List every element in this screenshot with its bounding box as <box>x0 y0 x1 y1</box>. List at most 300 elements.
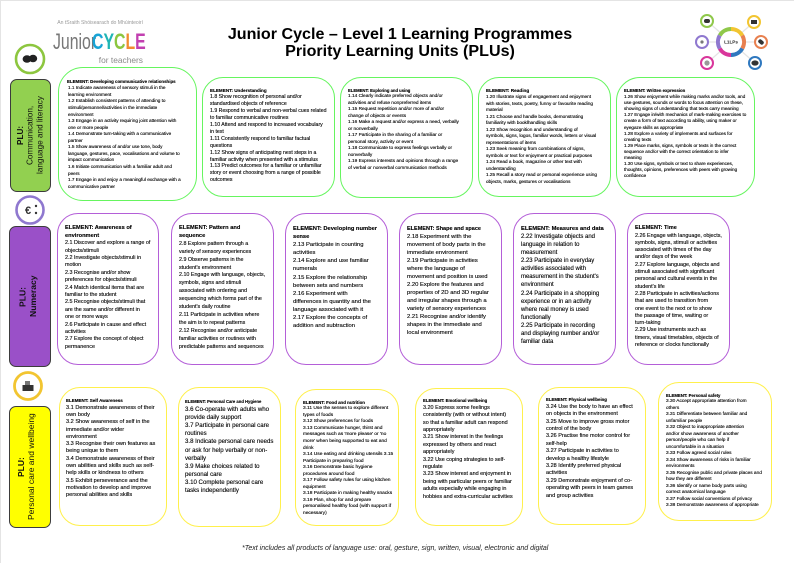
title: Junior Cycle – Level 1 Learning Programmes <box>228 25 572 43</box>
heading: environment <box>65 233 99 239</box>
outcomes text <box>635 233 722 348</box>
outcomes text: appropriately <box>423 449 454 455</box>
outcomes text: develop a healthy lifestyle <box>546 456 609 462</box>
outcomes text: 1.8 Show recognition of personal and/or <box>210 94 302 100</box>
outcomes text: functionally <box>521 315 551 321</box>
outcomes text: shapes in the immediate and <box>407 322 482 328</box>
outcomes text: 3.34 Show awareness of risks in familiar <box>666 458 751 463</box>
outcomes text <box>185 406 274 494</box>
outcomes text: 3.9 Make choices related to <box>185 463 260 470</box>
outcomes text: material <box>486 107 503 112</box>
outcomes text: 1.26 Show enjoyment while making marks and/or tools, and <box>624 94 745 99</box>
outcomes text: 2.12 Recognise and/or anticipate <box>179 328 257 334</box>
outcomes text: 3.36 Identify or name body parts using <box>666 484 747 489</box>
outcomes text <box>210 94 327 183</box>
outcomes text: appropriately <box>423 427 454 433</box>
outcomes text: peers <box>68 171 80 176</box>
outcomes text: partner <box>68 138 83 143</box>
panel: shape and space <box>399 213 502 365</box>
outcomes text: 2.6 Participate in cause and effect <box>65 322 146 328</box>
outcomes text <box>65 240 150 350</box>
outcomes text: objects, marks, gestures or vocalisations <box>486 179 570 184</box>
heading: ELEMENT: Time <box>635 225 677 231</box>
outcomes text: that are used to transition from <box>635 298 708 304</box>
outcomes text: regulate <box>423 464 443 470</box>
outcomes text: tasks independently <box>185 487 239 494</box>
outcomes text: 2.5 Recognise objects/stimuli that <box>65 299 145 305</box>
panel: understanding <box>202 77 335 197</box>
outcomes text: 1.24 Read a book, magazine or other text with <box>486 159 582 164</box>
outcomes text: symbols, signs, logos, familiar words, letters or visual <box>486 133 596 138</box>
outcomes text: communicative partner <box>68 184 115 189</box>
outcomes text: objects/stimuli <box>65 248 99 254</box>
outcomes text: 2.25 Participate in recording <box>521 323 595 329</box>
outcomes text: associated with times of the day <box>635 247 711 253</box>
outcomes text: being unique to them <box>66 448 118 454</box>
outcomes text: are the same and/or different in <box>65 307 140 313</box>
outcomes text: 2.16 Experiment with <box>293 291 348 297</box>
outcomes text: and displaying number and/or <box>521 331 599 337</box>
outcomes text: 2.18 Experiment with the <box>407 234 471 240</box>
outcomes text: stimuli/personnel/activities in the immediate <box>68 105 157 110</box>
outcomes text: 2.11 Participate in activities where <box>179 312 259 318</box>
outcomes text: Participate in preparing food <box>303 459 364 464</box>
outcomes text: 1.5 Show awareness of and/or use tone, body <box>68 144 162 149</box>
outcomes text: 1.2 Establish consistent patterns of attending to <box>68 98 166 103</box>
outcomes text: language in relation to <box>521 242 579 248</box>
outcomes text: 3.37 Follow social conventions of privacy <box>666 497 752 502</box>
outcomes text: 3.26 Practise fine motor control for <box>546 433 630 439</box>
outcomes text: being with particular peers or familiar <box>423 479 512 485</box>
outcomes text <box>520 234 600 345</box>
outcomes text: motivation to develop and improve <box>66 485 151 491</box>
outcomes text: standardised objects of reference <box>210 101 287 107</box>
outcomes text: environment <box>68 112 94 116</box>
outcomes text: 3.24 Use the body to have an effect <box>546 404 633 410</box>
outcomes text: 2.22 Investigate objects and <box>521 234 595 240</box>
outcomes text: 1.28 Explore a variety of implements and surfaces for <box>624 131 733 136</box>
panel label: numeracy <box>9 226 51 367</box>
outcomes text: 3.10 Complete personal care <box>185 479 263 486</box>
outcomes text: control of the body <box>546 426 591 432</box>
outcomes text: the passage of time, waiting or <box>635 313 708 319</box>
outcomes text: symbols, signs and stimuli <box>179 280 241 286</box>
outcomes text: 3.11 Use the senses to explore different <box>303 406 388 411</box>
outcomes text: learning environment <box>68 92 111 97</box>
outcomes text: with stories, texts, poetry, funny or favourite reading <box>486 101 593 106</box>
outcomes text: between sets and numbers <box>293 283 363 289</box>
panel label: numeracy: Numeracy <box>28 276 38 317</box>
logo: Junior Cycle for teachers: for teachers <box>99 55 143 65</box>
outcomes text: 2.13 Participate in counting <box>293 242 364 248</box>
heading: ELEMENT: Self Awareness <box>66 398 123 403</box>
icon: L1LPs wheel <box>695 14 768 70</box>
outcomes text: so that a familiar adult can respond <box>423 420 508 426</box>
outcomes text: 3.31 Differentiate between familiar and <box>666 412 747 417</box>
outcomes text: questions <box>210 143 232 149</box>
outcomes text: environments <box>666 464 695 469</box>
outcomes text: 2.9 Observe patterns in the <box>179 257 243 263</box>
panel: food and nutrition <box>295 389 399 526</box>
outcomes text: motion <box>65 262 81 268</box>
outcomes text: sequence and/or with the correct orientation to infer <box>624 149 729 154</box>
outcomes text: 3.18 Participate in making healthy snacks <box>303 491 392 496</box>
outcomes text: 3.30 Accept appropriate attention from <box>666 399 747 404</box>
outcomes text: 2.17 Explore the concepts of <box>293 315 367 321</box>
panel: written expression <box>616 77 755 197</box>
icon: personal care and wellbeing <box>13 371 43 401</box>
panel label: personal care and wellbeing <box>9 406 51 528</box>
outcomes text: correct anatomical language <box>666 490 726 495</box>
outcomes text: creating texts <box>624 137 651 142</box>
outcomes text: 1.19 Express interests and opinions through a range <box>348 159 458 164</box>
outcomes text: familiar activities or routines with <box>179 336 256 342</box>
outcomes text: and/or days of the week <box>635 254 692 260</box>
outcomes text: immediate environment <box>407 250 468 256</box>
outcomes text: timers, visual timetables, objects of <box>635 335 719 341</box>
outcomes text <box>348 94 459 171</box>
outcomes text: 1.9 Respond to verbal and non-verbal cues related <box>210 108 327 114</box>
outcomes text: verbally <box>185 455 206 462</box>
outcomes text: 2.27 Explore language, objects and <box>635 262 720 268</box>
outcomes text: 1.15 Request repetition and/or more of and/or <box>348 107 444 112</box>
outcomes text: confidence <box>624 173 646 178</box>
outcomes text: one or more people <box>68 125 108 130</box>
outcomes text <box>423 405 513 500</box>
outcomes text: 1.1 Indicate awareness of sensory stimuli in the <box>68 85 166 90</box>
outcomes text <box>66 405 156 498</box>
outcomes text: operating with peers in team games <box>546 485 633 491</box>
outcomes text: 2.23 Participate in everyday <box>521 258 594 264</box>
outcomes text: or nonverbally <box>348 127 378 132</box>
heading: ELEMENT: Developing number <box>293 226 377 232</box>
outcomes text: 3.6 Co-operate with adults who <box>185 406 269 413</box>
outcomes text: immediate and/or wider <box>66 427 124 433</box>
outcomes text: activities <box>293 250 315 256</box>
heading: sequence <box>179 233 205 239</box>
heading: ELEMENT: Reading <box>486 88 529 93</box>
outcomes text: familiarity with booklhandling skills <box>486 120 557 125</box>
outcomes text: addition and subtraction <box>293 323 355 329</box>
outcomes text: 3.35 Recognise public and private places and <box>666 471 762 476</box>
outcomes text: symbols or text for enjoyment or practical purposes <box>486 153 592 158</box>
outcomes text: personal and cultural events in the <box>635 276 717 282</box>
outcomes text: 3.22 Use coping strategies to self- <box>423 457 505 463</box>
outcomes text: 3.13 Communicate hunger, thirst and <box>303 426 382 431</box>
outcomes text: activities <box>546 470 567 476</box>
outcomes text: activities associated with <box>521 266 586 272</box>
outcomes text: 2.10 Engage with language, objects, <box>179 272 265 278</box>
outcomes text: student's environment <box>179 265 231 271</box>
outcomes text: 1.17 Participate in the sharing of a familiar or <box>348 133 442 138</box>
panel: personal safety <box>658 382 772 521</box>
outcomes text: personalised healthy food (with support if <box>303 504 391 509</box>
outcomes text: or ask for help verbally or non- <box>185 447 267 454</box>
outcomes text: variety of sensory experiences <box>407 306 486 312</box>
outcomes text: 3.28 Identify preferred physical <box>546 463 621 469</box>
outcomes text: hobbies and extra-curricular activities <box>423 494 513 500</box>
footnote: *Text includes all products of language use: oral, gesture, sign, written, visual, electronic and digital <box>242 545 548 552</box>
outcomes text: personal care <box>185 471 222 478</box>
outcomes text: showing signs of understanding that texts carry meaning <box>624 106 739 111</box>
outcomes text: 3.33 Follow agreed social rules <box>666 451 731 456</box>
outcomes text: properties of 2D and 3D regular <box>407 290 489 296</box>
outcomes text: environment <box>66 434 97 440</box>
heading: ELEMENT: Shape and space <box>407 226 481 232</box>
panel: reading <box>478 77 611 197</box>
outcomes text: movement of body parts in the <box>407 242 486 248</box>
outcomes text: student's life <box>635 284 665 290</box>
outcomes text: experience or in an activity <box>521 299 591 305</box>
outcomes text: 2.21 Recognise and/or identify <box>407 314 486 320</box>
outcomes text: where real money is used <box>521 307 589 313</box>
heading: ELEMENT: Physical wellbeing <box>546 397 607 402</box>
outcomes text: to familiar communicative routines <box>210 115 288 121</box>
heading: ELEMENT: Pattern and <box>179 225 240 231</box>
outcomes text: activities <box>65 329 86 335</box>
outcomes text: expressed by others and react <box>423 442 496 448</box>
outcomes text: of verbal or nonverbal communication methods <box>348 166 447 171</box>
outcomes text: 3.12 Show preferences for foods <box>303 419 373 424</box>
outcomes text <box>406 234 489 336</box>
outcomes text: activities and refuse nonpreferred items <box>348 101 431 106</box>
panel label: communication, language and literacy <box>10 79 51 192</box>
outcomes text: turn-taking <box>635 320 660 326</box>
panel label: personal care and wellbeing: Personal care and wellbeing <box>26 414 36 520</box>
icon: L1LPs wheel: L1LPs <box>724 40 738 45</box>
outcomes text: 3.3 Recognise their own features as <box>66 441 155 447</box>
icon: numeracy: € <box>25 205 31 217</box>
outcomes text: 3.16 Demonstrate basic hygiene <box>303 465 372 470</box>
outcomes text: own abilities and skills such as self- <box>66 463 154 469</box>
outcomes text: the aim is to repeat patterns <box>179 320 245 326</box>
outcomes text: 3.1 Demonstrate awareness of their <box>66 405 155 411</box>
outcomes text: 1.14 Clearly indicate preferred objects and/or <box>348 94 443 99</box>
outcomes text: 1.11 Consistently respond to familiar factual <box>210 136 310 142</box>
outcomes text <box>546 404 633 499</box>
outcomes text: 3.23 Show interest and enjoyment in <box>423 471 511 477</box>
outcomes text: predictable patterns and sequences <box>179 344 264 350</box>
outcomes text: 3.7 Participate in personal care <box>185 422 269 429</box>
outcomes text: impact communication <box>68 157 114 162</box>
outcomes text: 3.32 Object to inappropriate attention <box>666 425 744 430</box>
panel: exploring and using <box>340 77 473 198</box>
outcomes text: familiar to the student <box>65 292 117 298</box>
outcomes text: how they are different <box>666 477 712 482</box>
outcomes text: environment <box>521 282 554 288</box>
outcomes text: language, gestures, pace, vocalisations and volume to <box>68 151 180 156</box>
outcomes text: adults especially while engaging in <box>423 486 506 492</box>
panel label: personal care and wellbeing: PLU: <box>16 457 26 477</box>
heading: ELEMENT: Emotional wellbeing <box>423 398 487 403</box>
outcomes text <box>486 94 597 184</box>
outcomes text: 2.4 Match identical items that are <box>65 285 144 291</box>
panel: self awareness <box>59 387 167 526</box>
panel label: numeracy: PLU: <box>18 286 28 307</box>
panel: emotional wellbeing <box>415 388 523 526</box>
heading: sense <box>293 234 309 240</box>
outcomes text: 3.20 Express some feelings <box>423 405 490 411</box>
outcomes text: 2.15 Explore the relationship <box>293 275 367 281</box>
logo: Junior Cycle for teachers: An tSraith Shóisearach do Mhúinteoirí <box>57 20 143 26</box>
outcomes text: story or event choosing from a range of possible <box>210 170 321 176</box>
outcomes text: others <box>666 406 679 411</box>
panel: time <box>627 213 730 365</box>
icon: numeracy <box>15 195 45 225</box>
outcomes text: meaning <box>624 155 642 160</box>
outcomes text: 1.20 Illustrate signs of engagement and enjoyment <box>486 94 591 99</box>
outcomes text: outcomes <box>210 177 232 183</box>
outcomes text: 1.12 Show signs of anticipating next steps in a <box>210 150 316 156</box>
outcomes text: 3.27 Participate in activities to <box>546 448 619 454</box>
panel: developing communicative relationships <box>58 67 197 201</box>
outcomes text: 2.24 Participate in a shopping <box>521 291 599 297</box>
outcomes text: 3.14 Use eating and drinking utensils 3.15 <box>303 452 393 457</box>
outcomes text: 3.29 Demonstrate enjoyment of co- <box>546 478 632 484</box>
heading: ELEMENT: Personal safety <box>666 393 720 398</box>
heading <box>293 226 377 240</box>
icon: communication speech bubbles <box>14 44 46 74</box>
outcomes text: eyegaze skills as appropriate <box>624 125 683 130</box>
outcomes text: 2.1 Discover and explore a range of <box>65 240 150 246</box>
outcomes text: 2.28 Participate in activities/actions <box>635 291 719 297</box>
outcomes text: 3.17 Follow safety rules for using kitchen <box>303 478 390 483</box>
outcomes text <box>303 406 393 516</box>
outcomes text: more' when being supported to eat and <box>303 439 387 444</box>
outcomes text: student's daily routine <box>179 304 231 310</box>
outcomes text: on objects in the environment <box>546 411 618 417</box>
outcomes text: 3.2 Show awareness of self in the <box>66 419 150 425</box>
heading: ELEMENT: Food and nutrition <box>303 400 365 405</box>
heading: ELEMENT: Developing communicative relationships <box>67 79 176 84</box>
outcomes text: 1.25 Recall a story read or personal experience using <box>486 172 597 177</box>
panel: physical wellbeing <box>538 387 646 525</box>
outcomes text: 1.30 Use signs, symbols or text to share experiences, <box>624 161 733 166</box>
outcomes text: measurement <box>521 250 557 256</box>
outcomes text: measurement in the student's <box>521 274 599 280</box>
outcomes text: 1.18 Communicate to express feelings verbally or <box>348 146 452 151</box>
outcomes text: representations of items <box>486 140 536 145</box>
outcomes text: 1.29 Place marks, signs, symbols or texts in the correct <box>624 143 736 148</box>
outcomes text: own body <box>66 412 90 418</box>
outcomes text: and/or show awareness of another <box>666 432 739 437</box>
outcomes text: 3.5 Exhibit perseverance and the <box>66 478 148 484</box>
outcomes text: 2.26 Engage with language, objects, <box>635 233 722 239</box>
outcomes text: 3.4 Demonstrate awareness of their <box>66 456 155 462</box>
outcomes text <box>666 398 762 508</box>
outcomes text: 2.7 Explore the concept of object <box>65 336 144 342</box>
panel label: communication, language and literacy: Communication, <box>26 106 35 165</box>
outcomes text: personal abilities and skills <box>66 492 132 498</box>
outcomes text: 1.4 Demonstrate turn-taking with a communicative <box>68 131 171 136</box>
outcomes text <box>179 241 265 350</box>
outcomes text: 1.27 Engage in/with mechanics of mark-making exercises to <box>624 112 746 117</box>
outcomes text: 1.7 Engage in and enjoy a meaningful exchange with a <box>68 177 181 182</box>
outcomes text: local environment <box>407 330 453 336</box>
outcomes text: drink <box>303 446 314 451</box>
heading: ELEMENT: Exploring and using <box>348 88 410 93</box>
outcomes text: reference or clocks functionally <box>635 342 709 348</box>
outcomes text: 1.13 Predict outcomes for a familiar or unfamiliar <box>210 163 322 169</box>
outcomes text: nonverbally <box>348 153 372 158</box>
outcomes text: familiar activity when presented with a stimulus <box>210 157 318 163</box>
outcomes text: 2.29 Use instruments such as <box>635 327 706 333</box>
outcomes text: where the language of <box>407 266 465 272</box>
outcomes text: numerals <box>293 266 317 272</box>
logo: Junior Cycle for teachers: Junior <box>53 29 96 54</box>
outcomes text: change of objects or events <box>348 114 406 119</box>
outcomes text: variety of sensory experiences <box>179 249 251 255</box>
heading: ELEMENT: Understanding <box>210 88 267 92</box>
panel: developing number sense <box>285 213 388 365</box>
outcomes text: personal story, activity or event <box>348 140 413 145</box>
outcomes text: familiar data <box>521 339 553 345</box>
outcomes text: 1.21 Choose and handle books, demonstrating <box>486 114 583 119</box>
outcomes text: one or more ways <box>65 314 108 320</box>
outcomes text: 1.23 Seek meaning from combinations of signs, <box>486 146 585 151</box>
outcomes text: create a form of text according to ability, using maker or <box>624 118 737 123</box>
outcomes text: provide daily support <box>185 414 241 421</box>
outcomes text: symbols, signs, stimuli or activities <box>635 240 717 246</box>
outcomes text: help skills or kindness to others <box>66 470 144 476</box>
outcomes text: 3.25 Move to improve gross motor <box>546 418 629 424</box>
heading: ELEMENT: Measures and data <box>521 226 604 232</box>
outcomes text: 1.3 Engage in an activity requiring joint attention with <box>68 118 176 123</box>
outcomes text: sequencing which forms part of the <box>179 296 262 302</box>
outcomes text: 2.8 Explore pattern through a <box>179 241 248 247</box>
outcomes text: in text <box>210 129 224 135</box>
outcomes text: person/people who can help if <box>666 438 729 443</box>
outcomes text: 1.6 Initiate communication with a familiar adult and <box>68 164 172 169</box>
outcomes text: associated with ordering and <box>179 288 247 294</box>
outcomes text: messages such as 'more please' or 'no <box>303 432 386 437</box>
outcomes text: self-help <box>546 441 567 447</box>
panel: measures and data <box>513 213 616 365</box>
heading: ELEMENT: Awareness of <box>65 225 132 231</box>
outcomes text: 1.16 Make a request and/or express a need, verbally <box>348 120 459 125</box>
outcomes text: routines <box>185 430 207 437</box>
outcomes text: differences in quantity and the <box>293 299 371 305</box>
panel: pattern and sequence <box>171 213 274 365</box>
panel: awareness of environment <box>57 213 159 365</box>
outcomes text: 2.20 Explore the features and <box>407 282 484 288</box>
outcomes text: understanding <box>486 166 516 171</box>
outcomes text: language associated with it <box>293 307 363 313</box>
heading: ELEMENT: Written expression <box>624 88 685 93</box>
outcomes text: 2.14 Explore and use familiar <box>293 258 369 264</box>
outcomes text: consistently (with or without intent) <box>423 412 506 418</box>
subtitle: Priority Learning Units (PLUs) <box>285 42 515 60</box>
logo: Junior Cycle for teachers <box>53 20 146 65</box>
heading <box>179 225 240 239</box>
outcomes text: and irregular shapes through a <box>407 298 487 304</box>
outcomes text: and group activities <box>546 493 593 499</box>
logo: Junior Cycle for teachers: CYCLE <box>92 29 146 54</box>
outcomes text: 3.8 Indicate personal care needs <box>185 438 273 445</box>
outcomes text: use gestures, sounds or words to focus attention on these, <box>624 100 743 105</box>
outcomes text <box>293 242 371 329</box>
outcomes text <box>624 94 746 178</box>
outcomes text: thoughts, opinions, preferences with peers with growing <box>624 167 737 172</box>
outcomes text: 3.21 Show interest in the feelings <box>423 434 503 440</box>
outcomes text: 1.22 Show recognition and understanding of <box>486 127 578 132</box>
heading <box>65 225 132 239</box>
outcomes text: uncomfortable in a situation <box>666 445 724 450</box>
panel label: communication, language and literacy: PLU: <box>16 126 25 145</box>
outcomes text: movement and position is used <box>407 274 488 280</box>
outcomes text: stimuli associated with significant <box>635 269 714 275</box>
outcomes text: permanence <box>65 344 95 350</box>
